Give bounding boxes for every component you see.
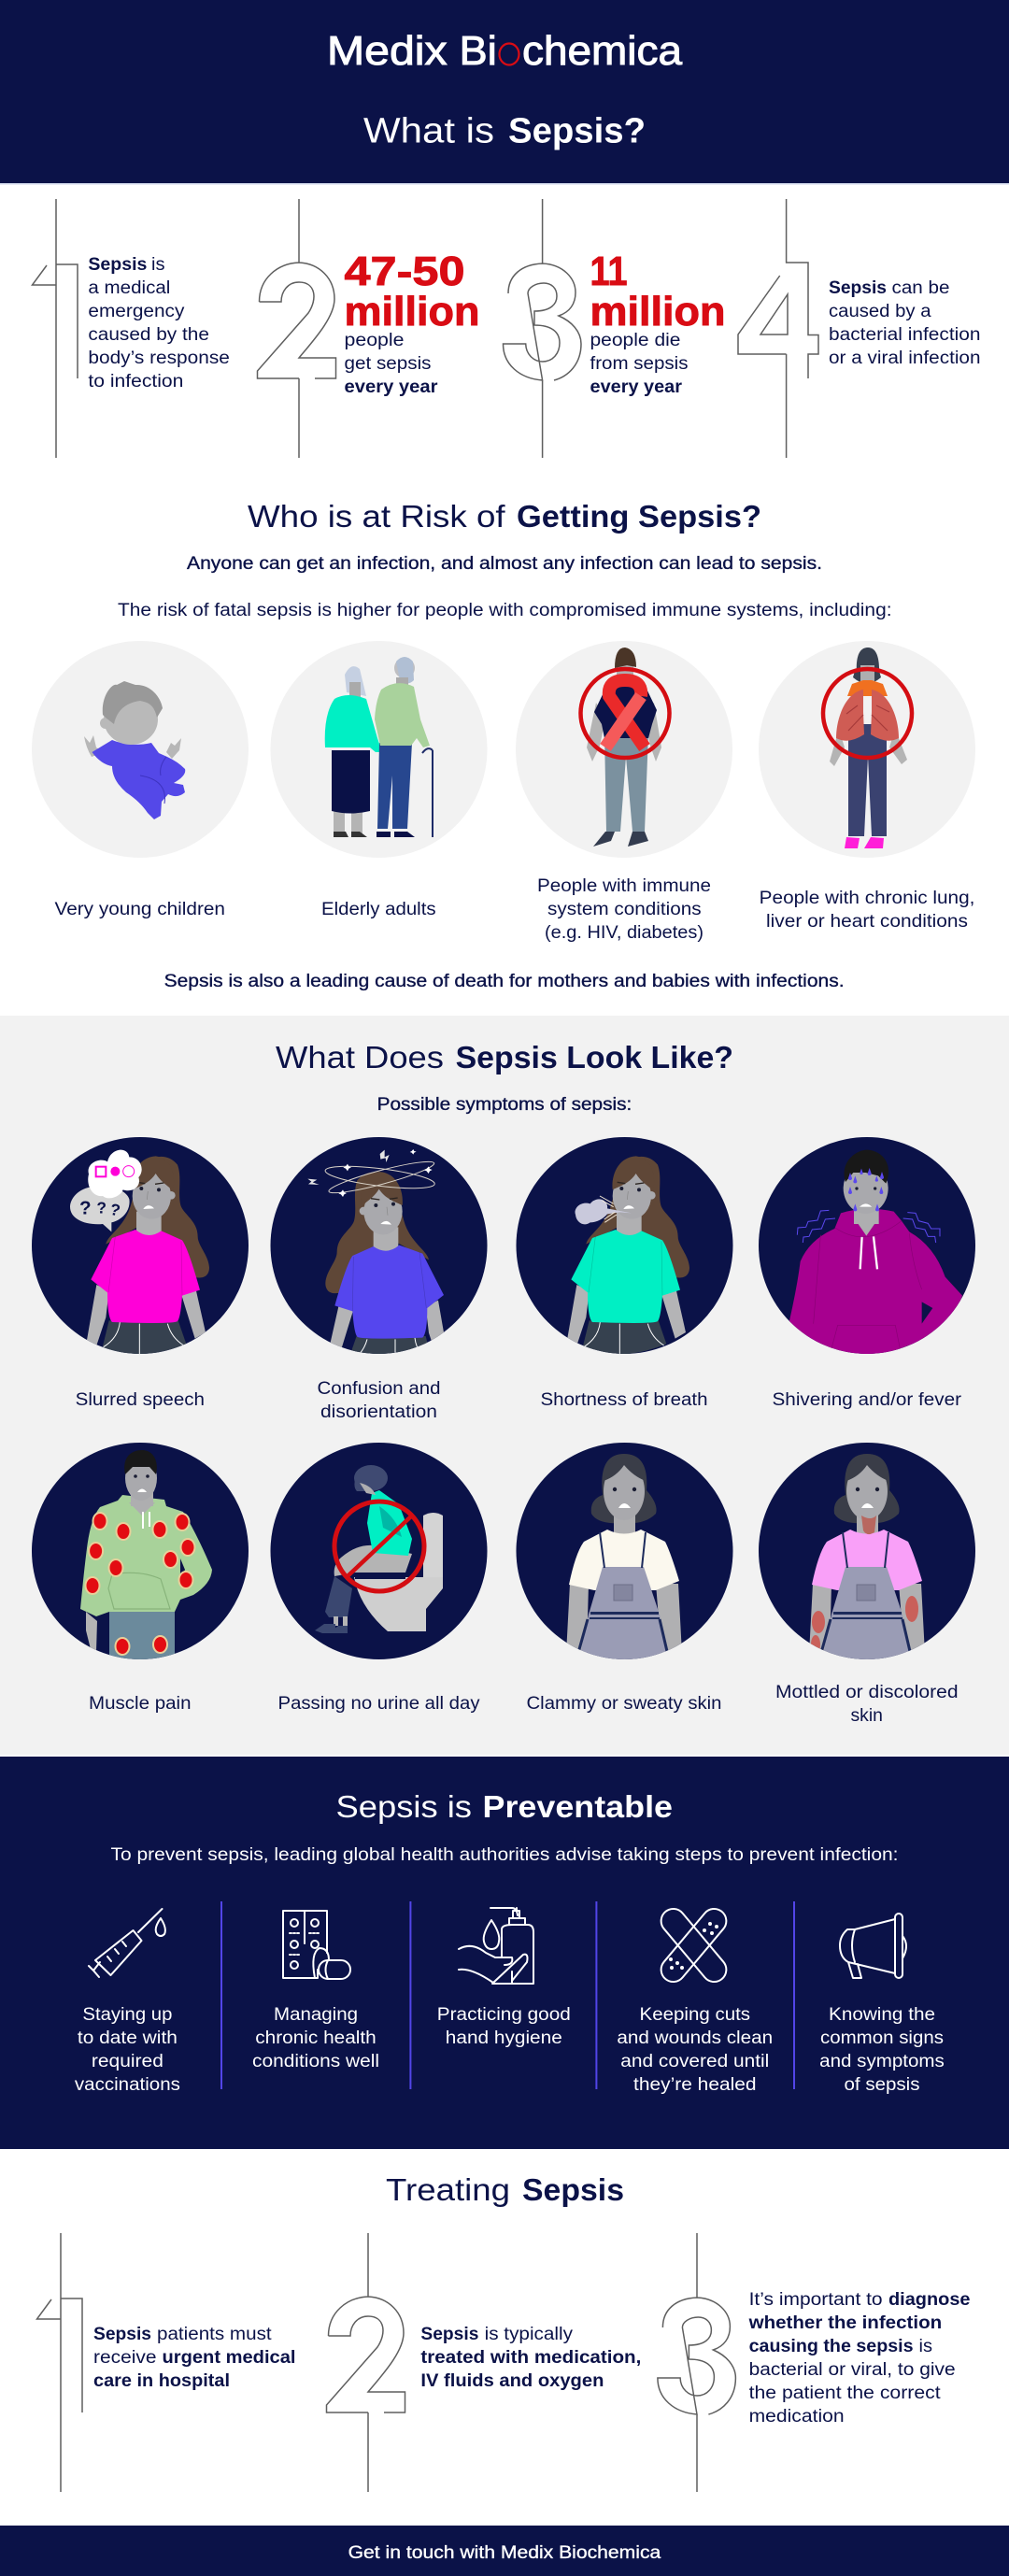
- heading: who is at risk: [248, 499, 761, 534]
- note: mothers and babies: Sepsis is also a leading cause of death for mothers and babies with infections.: [164, 972, 845, 991]
- subheading: Possible symptoms of sepsis:: [377, 1095, 632, 1115]
- step text: hand hygiene: Practicing good: [437, 2005, 571, 2025]
- heading: sepsis is preventable: Preventable: [482, 1789, 673, 1824]
- heading: treating sepsis: Sepsis: [522, 2172, 624, 2207]
- icon: person with ribbon: [516, 641, 732, 858]
- title: What is Sepsis?: Sepsis?: [508, 112, 646, 151]
- icon: shortness of breath: [516, 1137, 732, 1355]
- risk label: chronic conditions: liver or heart conditions: [766, 912, 968, 932]
- fact 4 text: bacterial infection: [829, 325, 981, 345]
- fact 4 text: Sepsis: [829, 278, 887, 298]
- fact 3 text: people die: [590, 331, 680, 350]
- symptom label: confusion: disorientation: [320, 1402, 437, 1422]
- treatment 1 text: patients must: [157, 2325, 272, 2344]
- heading: who is at risk: Who is at Risk of: [248, 499, 506, 534]
- footer band: [0, 2526, 1009, 2576]
- heading: sepsis is preventable: Sepsis is: [336, 1789, 472, 1824]
- fact 1 text: body’s response: [88, 349, 230, 368]
- fact 4 text: can be: [891, 278, 949, 298]
- step text: chronic conditions: Managing: [274, 2005, 358, 2025]
- fact 1 text: is: [151, 255, 164, 275]
- step text: vaccinations: required: [92, 2052, 163, 2071]
- logo: Medix Biochemica: chemica: [522, 28, 683, 74]
- prevention intro: To prevent sepsis, leading global health authorities advise taking steps to prevent infection:: [110, 1845, 898, 1865]
- step text: vaccinations: [75, 2005, 180, 2095]
- treatment 3 text: whether the infection: [748, 2313, 942, 2333]
- icon: confusion: [271, 1137, 488, 1371]
- numeral 3 outline: [658, 2233, 735, 2492]
- treatment 2 text: Sepsis: [420, 2325, 478, 2344]
- risk label: immune system conditions: People with immune: [537, 876, 711, 896]
- fact 4 text: caused by a: [829, 302, 931, 321]
- intro line 1: Anyone can get an infection, and almost any infection can lead to sepsis.: [187, 554, 822, 574]
- symptom label: mottled skin: Mottled or discolored: [775, 1683, 959, 1702]
- header band: [0, 0, 1009, 185]
- fact 1 text: emergency: [88, 302, 185, 321]
- logo: Medix Biochemica: [327, 28, 683, 74]
- treatment 3 text: causing the sepsis: [749, 2337, 914, 2356]
- fact 2 text: every year: [344, 377, 438, 397]
- icon: elderly adults: [271, 641, 488, 858]
- icon: passing no urine: [271, 1443, 488, 1659]
- icon: pill blister: [283, 1911, 350, 1979]
- step text: vaccinations: to date with: [78, 2028, 178, 2048]
- treatment 3 text: diagnose: [888, 2290, 970, 2310]
- treatment 3 text: It’s important to: [749, 2290, 883, 2310]
- treatment 2 text: treated with medication,: [420, 2348, 641, 2368]
- icon: megaphone: [840, 1914, 906, 1978]
- heading: who is at risk: Getting Sepsis?: [517, 499, 761, 534]
- numeral 2 outline: [327, 2233, 405, 2492]
- panel: sepsis is preventable: [0, 1757, 1009, 2149]
- step text: signs: and symptoms: [819, 2052, 945, 2071]
- numeral 1 outline: [37, 2233, 82, 2492]
- panel: what does sepsis look like: [0, 1016, 1009, 1755]
- risk label: chronic conditions: [760, 889, 974, 932]
- step text: signs: of sepsis: [845, 2075, 919, 2095]
- intro line 2: The risk of fatal sepsis is higher for people with compromised immune systems, including:: [118, 601, 892, 620]
- fact 1 text: to infection: [88, 372, 183, 391]
- numeral 3 outline: [503, 199, 581, 458]
- panel: what is sepsis facts: [32, 199, 981, 458]
- fact 2 text: get sepsis: [344, 354, 432, 374]
- icon: bandage: [656, 1904, 732, 1986]
- heading: treating sepsis: Treating: [386, 2172, 510, 2207]
- symptom label: passing no urine: Passing no urine all day: [278, 1694, 480, 1714]
- icon: clammy skin: [516, 1443, 732, 1659]
- step text: vaccinations: Staying up: [82, 2005, 172, 2025]
- risk label: elderly adults: Elderly adults: [321, 900, 436, 919]
- risk label: chronic conditions: People with chronic lung,: [760, 889, 974, 908]
- treatment 1 text: urgent medical: [163, 2348, 295, 2368]
- fact 2 text: million: [344, 289, 480, 334]
- step text: signs: [819, 2005, 945, 2095]
- fact 1 text: a medical: [88, 278, 170, 298]
- icon: slurred speech: [32, 1137, 249, 1355]
- treatment 3 text: the patient the correct: [749, 2384, 941, 2403]
- icon: slurred speech: ?: [108, 1200, 122, 1220]
- step text: wounds: and wounds clean: [617, 2028, 773, 2048]
- title: What is Sepsis?: [363, 112, 646, 151]
- treatment 2 text: [420, 2325, 641, 2391]
- icon: person with lungs: [759, 641, 975, 858]
- step text: hand hygiene: hand hygiene: [446, 2028, 562, 2048]
- step text: vaccinations: vaccinations: [75, 2075, 180, 2095]
- step text: chronic conditions: chronic health: [255, 2028, 377, 2048]
- symptom label: confusion: [318, 1379, 441, 1422]
- treatment 3 text: is: [919, 2337, 932, 2356]
- panel: treating sepsis: [37, 2172, 970, 2492]
- step text: hand hygiene: [437, 2005, 571, 2048]
- symptom label: shivering: Shivering and/or fever: [772, 1390, 962, 1410]
- logo: Medix Biochemica: Medix: [327, 28, 448, 74]
- treatment 1 text: receive: [93, 2348, 157, 2368]
- treatment 3 text: medication: [749, 2407, 845, 2427]
- heading: treating sepsis: [386, 2172, 624, 2207]
- fact 1 text: Sepsis: [88, 255, 147, 275]
- symptom label: slurred speech: Slurred speech: [76, 1390, 205, 1410]
- panel: who is at risk: [32, 499, 975, 991]
- step text: wounds: and covered until: [620, 2052, 769, 2071]
- step text: wounds: Keeping cuts: [640, 2005, 750, 2025]
- icon: shivering and fever: [759, 1137, 975, 1358]
- treatment 1 text: [93, 2325, 295, 2391]
- treatment 3 text: [748, 2290, 970, 2427]
- numeral 1 outline: [32, 199, 78, 458]
- numeral 4 outline: [738, 199, 818, 458]
- icon: muscle pain: [32, 1443, 249, 1659]
- heading: what does sepsis look like: Sepsis Look Like?: [456, 1040, 733, 1075]
- treatment 2 text: is typically: [485, 2325, 574, 2344]
- title: What is Sepsis?: What is: [363, 112, 494, 151]
- risk label: immune system conditions: system conditions: [547, 900, 702, 919]
- treatment 1 text: care in hospital: [93, 2371, 230, 2391]
- treatment 2 text: IV fluids and oxygen: [420, 2371, 604, 2391]
- symptom label: clammy skin: Clammy or sweaty skin: [527, 1694, 721, 1714]
- fact 4 text: [829, 278, 981, 368]
- numeral 2 outline: [258, 199, 336, 458]
- treatment 1 text: Sepsis: [93, 2325, 151, 2344]
- treatment 3 text: bacterial or viral, to give: [749, 2360, 956, 2380]
- step text: wounds: [617, 2005, 773, 2095]
- step text: signs: Knowing the: [829, 2005, 935, 2025]
- icon: slurred speech: ?: [96, 1198, 107, 1217]
- symptom label: confusion: Confusion and: [318, 1379, 441, 1399]
- fact 1 text: [88, 255, 230, 391]
- fact 4 text: or a viral infection: [829, 349, 981, 368]
- risk label: very young children: Very young children: [54, 900, 225, 919]
- fact 3 text: million: [590, 289, 725, 334]
- fact 3 text: [590, 249, 725, 397]
- step text: chronic conditions: [252, 2005, 379, 2071]
- icon: slurred speech: ?: [79, 1197, 92, 1218]
- symptom label: mottled skin: skin: [850, 1706, 883, 1726]
- risk label: immune system conditions: (e.g. HIV, diabetes): [545, 923, 703, 943]
- logo: Medix Biochemica: Bi: [460, 28, 497, 74]
- fact 2 text: [344, 249, 480, 397]
- fact 3 text: every year: [590, 377, 683, 397]
- step text: signs: common signs: [820, 2028, 944, 2048]
- heading: sepsis is preventable: [336, 1789, 673, 1824]
- symptom label: muscle pain: Muscle pain: [89, 1694, 191, 1714]
- step text: chronic conditions: conditions well: [252, 2052, 379, 2071]
- icon: hand sanitizer: [459, 1908, 533, 1984]
- fact 3 text: from sepsis: [590, 354, 688, 374]
- fact 3 text: 11: [590, 249, 628, 294]
- fact 1 text: caused by the: [88, 325, 209, 345]
- heading: what does sepsis look like: [276, 1040, 733, 1075]
- fact 2 text: people: [344, 331, 404, 350]
- risk label: immune system conditions: [537, 876, 711, 943]
- icon: syringe: [89, 1909, 165, 1977]
- step text: wounds: they’re healed: [633, 2075, 757, 2095]
- footer text: Get in touch with Medix Biochemica: [348, 2543, 661, 2563]
- heading: what does sepsis look like: What Does: [276, 1040, 444, 1075]
- symptom label: shortness of breath: Shortness of breath: [540, 1390, 708, 1410]
- fact 2 text: 47-50: [344, 249, 465, 294]
- icon: very young child: [32, 641, 249, 858]
- symptom label: mottled skin: [775, 1683, 959, 1726]
- icon: mottled skin: [759, 1443, 975, 1659]
